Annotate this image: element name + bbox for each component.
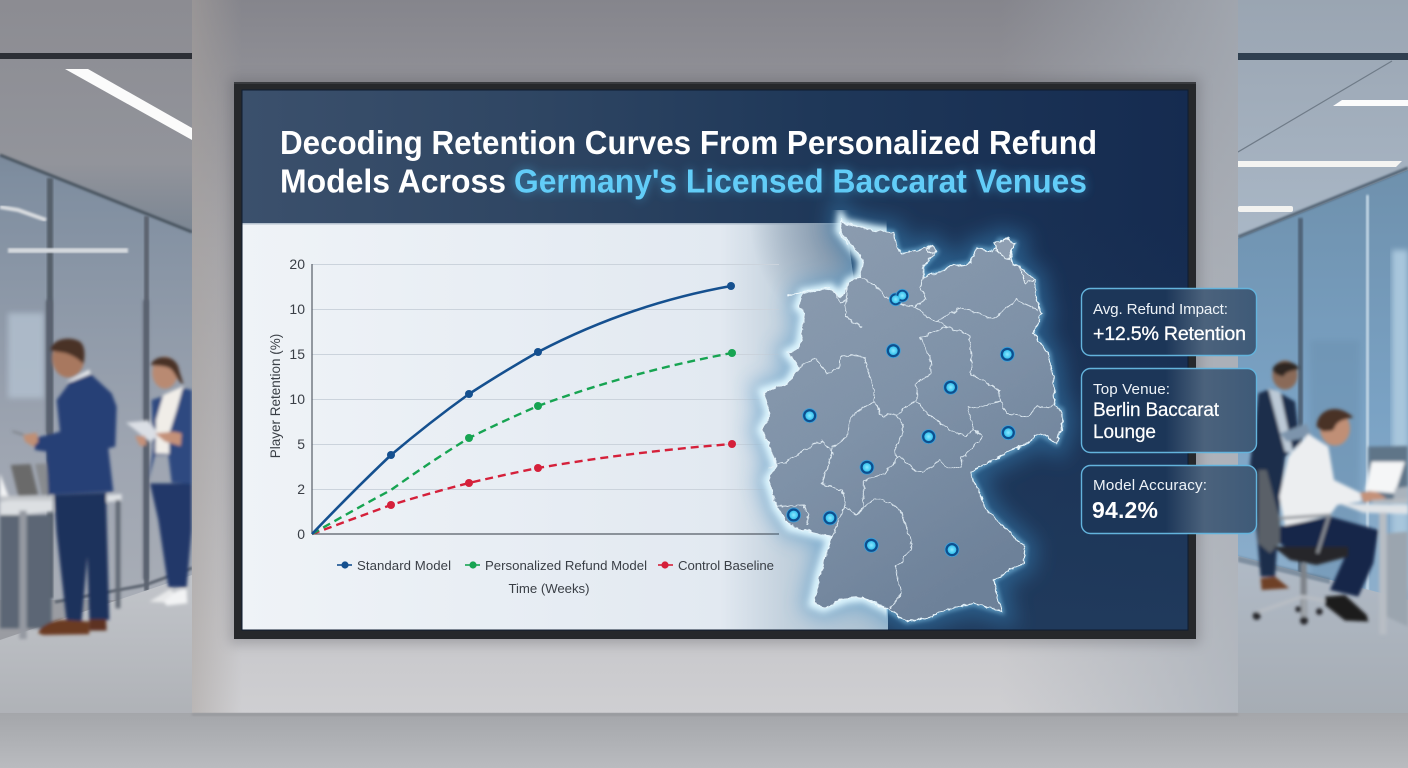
coast islands: [787, 218, 1035, 608]
card: average refund impact: [1082, 288, 1256, 356]
people and desks: left: [0, 300, 192, 639]
map of Germany: [762, 218, 1063, 622]
card: top venue: Top Venue:: [1093, 381, 1170, 398]
legend: Control Baseline: [678, 558, 774, 573]
legend: [337, 560, 774, 570]
card: average refund impact: +12.5% Retention: [1093, 323, 1246, 345]
legend: Personalized Refund Model: [485, 558, 647, 573]
woman: [150, 483, 192, 587]
display screen: [242, 90, 1188, 630]
series: standard model: [312, 282, 735, 534]
y axis tick labels: 5: [297, 436, 305, 452]
wall shadow behind display: [230, 78, 1200, 644]
gridlines: [312, 264, 779, 490]
series: personalized refund model: [312, 349, 736, 534]
title band background: [242, 90, 1188, 549]
dark map panel background: [995, 454, 1188, 630]
card: model accuracy: [1082, 466, 1256, 534]
title: Germany's Licensed Baccarat Venues: [514, 164, 1087, 200]
state borders: [768, 277, 1055, 608]
title: Decoding Retention Curves From Personalized Refund: [280, 125, 1097, 162]
axes: [312, 264, 779, 534]
title: [280, 125, 1097, 200]
y axis tick labels: 2: [297, 481, 305, 497]
man: [54, 493, 109, 622]
card: top venue: Lounge: [1093, 422, 1156, 443]
y axis tick labels: 10: [289, 391, 305, 407]
country silhouette: [762, 218, 1063, 622]
card: top venue: Berlin Baccarat: [1093, 400, 1220, 421]
card: model accuracy: 94.2%: [1092, 497, 1158, 523]
y axis tick labels: 20: [289, 256, 305, 272]
line chart: [268, 256, 779, 596]
people and desk: right: [1250, 360, 1408, 634]
title: Germany's Licensed Baccarat Venues: [514, 164, 1087, 200]
display frame: [234, 82, 1196, 639]
light chart panel background: [242, 223, 888, 630]
map glow: [762, 220, 1063, 622]
y axis title: Player Retention (%): [268, 334, 283, 458]
stat callouts: [1082, 288, 1256, 534]
y axis tick labels: 10: [289, 301, 305, 317]
office backdrop: right room: [1238, 0, 1408, 768]
office backdrop: left room: [0, 0, 192, 768]
card: model accuracy: Model Accuracy:: [1093, 477, 1207, 494]
venue pins: [787, 289, 1015, 557]
x axis title: Time (Weeks): [508, 581, 590, 596]
y axis tick labels: 15: [289, 346, 305, 362]
series: control baseline: [312, 440, 736, 534]
screen inner edge: [242, 90, 1188, 630]
title: Models Across: [280, 164, 506, 200]
card: top venue: [1082, 368, 1256, 452]
y axis tick labels: 0: [297, 526, 305, 542]
card: average refund impact: Avg. Refund Impact:: [1093, 301, 1228, 318]
legend: Standard Model: [357, 558, 451, 573]
y axis tick labels: [290, 260, 304, 539]
